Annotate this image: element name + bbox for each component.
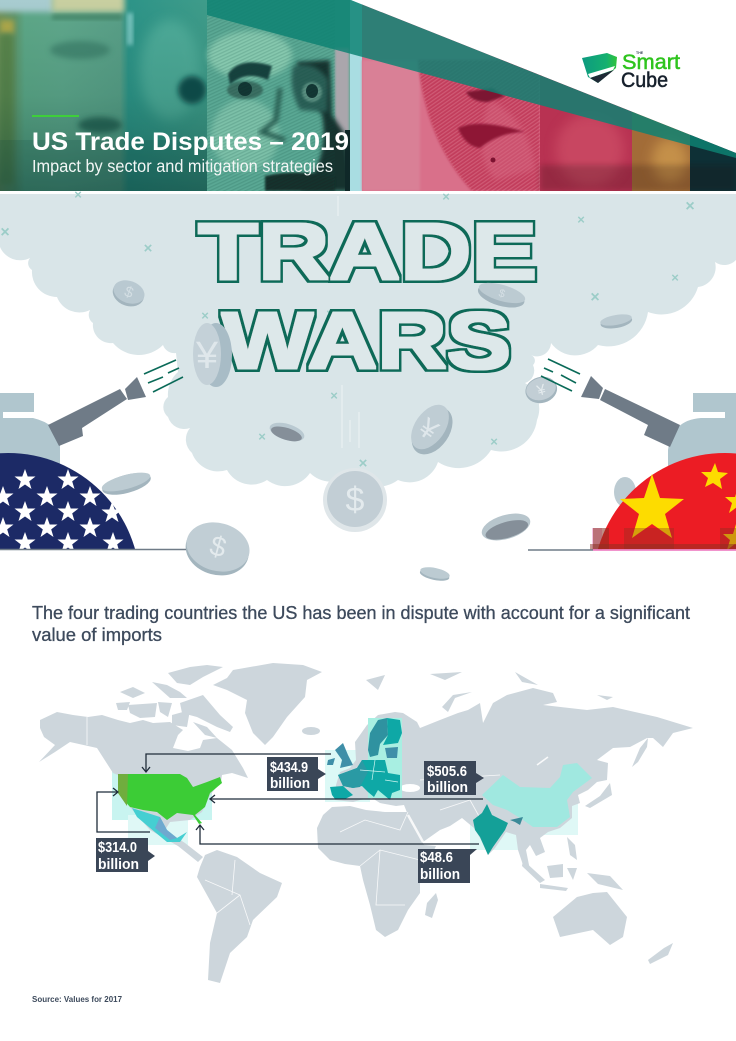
coin: dollar top left: $ [122, 283, 136, 302]
arrow: Mexico to USA [97, 788, 150, 832]
decorative x marks: × [685, 198, 695, 215]
map: European Union [327, 718, 402, 800]
coin: large yen: ¥ [195, 335, 219, 377]
decorative x marks: × [330, 388, 338, 403]
coin: centre dollar [323, 468, 387, 532]
logo wordmark: Smart [622, 51, 680, 74]
label: China value: $505.6 [427, 763, 467, 780]
label: China value [424, 761, 484, 796]
coin: behind China dome [614, 477, 636, 507]
decorative x marks: × [359, 455, 368, 472]
photo: blurred banknotes left [0, 0, 207, 191]
dome: US flag [0, 453, 135, 549]
photo: light strip between notes [350, 0, 362, 191]
decorative x marks [0, 187, 695, 472]
New Zealand [648, 943, 673, 964]
intro text [32, 603, 690, 645]
photo: Franklin on dollar bill [207, 0, 352, 191]
label: India value [418, 849, 477, 883]
dome: China flag [590, 453, 736, 550]
tank turret [668, 393, 736, 470]
map: Mexico [132, 808, 187, 842]
map: China [482, 763, 592, 827]
map: seas and country borders [87, 717, 548, 925]
coin: near title: $ [497, 287, 506, 301]
header photo banner [0, 0, 736, 191]
tank muzzle [581, 376, 603, 399]
header accent bar [32, 115, 79, 117]
Greenland [213, 663, 322, 745]
decorative x marks: × [671, 270, 679, 285]
arrow: EU to USA [142, 754, 331, 772]
logo wordmark: Cube [621, 69, 668, 92]
ground lines [0, 548, 593, 551]
coin: near title [475, 279, 527, 312]
title line: WARS: WARS [222, 296, 511, 385]
tank muzzle [125, 377, 146, 400]
intro text: value of imports [32, 625, 162, 645]
label: EU value: billion [270, 775, 310, 792]
coin: large dollar bottom left: $ [207, 530, 230, 564]
decorative x marks: × [326, 306, 334, 321]
tank firing lines [541, 359, 580, 391]
coin: large yen [193, 323, 232, 387]
world map [39, 663, 693, 983]
label: EU value: $434.9 [270, 759, 308, 776]
Kamchatka [632, 738, 648, 767]
coin: small right [599, 312, 633, 331]
decorative x marks: × [490, 434, 498, 449]
decorative x marks: × [260, 258, 270, 275]
Australia [553, 892, 627, 945]
decorative x marks: × [258, 429, 266, 444]
coin: flat yen left [100, 469, 153, 499]
photo: teal diagonal overlay band [207, 0, 736, 158]
decorative x marks: × [516, 270, 525, 287]
Eurasia [335, 688, 693, 870]
tank: China [540, 358, 736, 550]
map: land masses [39, 663, 693, 983]
label: Mexico value: $314.0 [98, 839, 137, 856]
north islands [366, 672, 613, 712]
decorative x marks: × [74, 187, 82, 202]
label: India value: billion [420, 866, 460, 883]
SE Asia islands [522, 837, 623, 891]
shading behind title [0, 140, 207, 191]
coin: tiny bottom [419, 565, 451, 583]
logo wordmark [621, 51, 680, 92]
map halo around highlighted regions [112, 750, 578, 850]
pink base artefact [592, 528, 602, 550]
label: Mexico value [96, 838, 155, 873]
tank gun [600, 389, 680, 447]
intro text: The four trading countries the US has been in dispute with account for a significant [32, 603, 690, 623]
header title: US Trade Disputes – 2019 [32, 128, 349, 156]
header subtitle: Impact by sector and mitigation strategies [32, 156, 333, 176]
coin: yen tilted centre [402, 398, 462, 462]
illustration: smoke cloud [0, 194, 736, 487]
coin: small yen right: ¥ [534, 381, 548, 400]
map: halo behind EU [368, 718, 402, 798]
North America [39, 712, 248, 862]
label: China value: billion [427, 779, 468, 796]
South America [197, 850, 282, 983]
decorative x marks: × [144, 240, 153, 257]
decorative x marks: × [228, 219, 236, 234]
Arctic islands [116, 665, 233, 738]
coin: yen tilted centre: ¥ [412, 411, 444, 446]
Africa [317, 806, 436, 937]
coin: dollar top left [109, 276, 148, 311]
source note: Source: Values for 2017 [32, 995, 123, 1004]
title line: TRADE: TRADE [198, 207, 537, 296]
decorative x marks: × [442, 189, 450, 204]
tank turret [0, 393, 60, 470]
tank firing lines [144, 360, 183, 392]
map: USA [118, 774, 222, 824]
label: India value: $48.6 [420, 849, 453, 866]
coin: bottom right [479, 509, 533, 545]
decorative x marks: × [577, 212, 585, 227]
title: TRADE WARS [198, 207, 537, 385]
coin: large dollar bottom left [180, 516, 255, 582]
decorative x marks: × [0, 224, 10, 241]
coin: centre dollar: $ [346, 481, 365, 519]
decorative x marks: × [424, 355, 432, 370]
decorative x marks: × [243, 356, 251, 371]
decorative x marks: × [201, 308, 209, 323]
Madagascar [425, 893, 438, 918]
photo: yuan banknote [362, 0, 736, 191]
logo: The Smart Cube [582, 51, 680, 92]
decorative x marks: × [419, 266, 427, 281]
logo wordmark: THE [636, 51, 644, 55]
map: India [473, 804, 523, 855]
coin: tilted mid [267, 419, 307, 445]
label: EU value [267, 757, 326, 792]
Iceland [302, 727, 320, 735]
decorative x marks: × [590, 289, 600, 306]
Japan [585, 783, 612, 808]
arrow: India to USA [196, 825, 479, 844]
coin: small yen right [522, 373, 560, 407]
label: Mexico value: billion [98, 856, 139, 873]
icon: logo cube [582, 53, 617, 83]
arrow: China to USA [210, 795, 483, 803]
tank gun [48, 389, 127, 446]
tank: USA [0, 359, 184, 549]
